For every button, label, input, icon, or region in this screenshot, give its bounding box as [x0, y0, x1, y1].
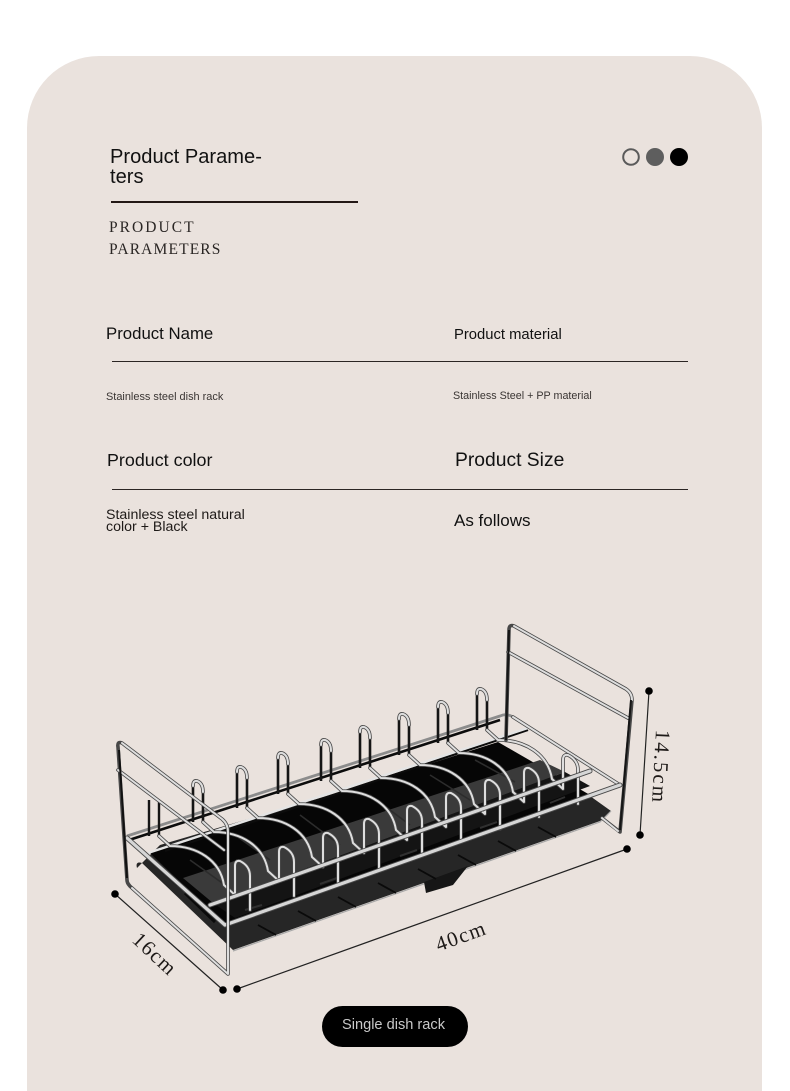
label: product color: Product color	[107, 450, 212, 470]
value: product size: As follows	[454, 511, 531, 530]
wire plate dividers	[149, 689, 578, 910]
dimension: 14.5cm: 14.5cm	[647, 729, 675, 805]
divider: first row	[112, 360, 688, 362]
value: product color	[106, 507, 245, 535]
dimension: 16cm	[111, 890, 227, 994]
heading: product parameters	[110, 146, 262, 188]
button label: single dish rack	[322, 1006, 468, 1047]
label: product size: Product Size	[455, 450, 564, 470]
rack back rails	[127, 715, 620, 853]
dimension: 14.5cm	[636, 687, 675, 839]
rack tray	[137, 742, 611, 951]
subheading: serif capitals: PRODUCT	[109, 219, 196, 236]
subheading: serif capitals: PARAMETERS	[109, 241, 222, 258]
chart: dish rack illustration with dimensions	[111, 624, 675, 994]
label: product material: Product material	[454, 327, 562, 343]
heading: product parameters: ters	[110, 166, 144, 188]
value: product name: Stainless steel dish rack	[106, 391, 223, 403]
value: product color: Stainless steel natural	[106, 507, 245, 523]
heading underline	[111, 200, 358, 202]
icon: three colour dots	[622, 148, 688, 166]
divider: second row	[112, 488, 688, 490]
rack right end frame	[506, 626, 632, 832]
value: product material: Stainless Steel + PP material	[453, 390, 592, 402]
button label: single dish rack: Single dish rack	[342, 1017, 445, 1033]
rack left end frame	[118, 742, 228, 974]
dimension: 40cm	[233, 845, 631, 993]
subheading: serif capitals	[109, 219, 222, 258]
heading: product parameters: Product Parame-	[110, 146, 262, 168]
rack front rails	[127, 771, 620, 925]
dimension: 40cm: 40cm	[432, 916, 490, 956]
label: product name: Product Name	[106, 324, 213, 343]
dimension: 16cm: 16cm	[128, 927, 182, 981]
value: product color: color + Black	[106, 519, 188, 535]
